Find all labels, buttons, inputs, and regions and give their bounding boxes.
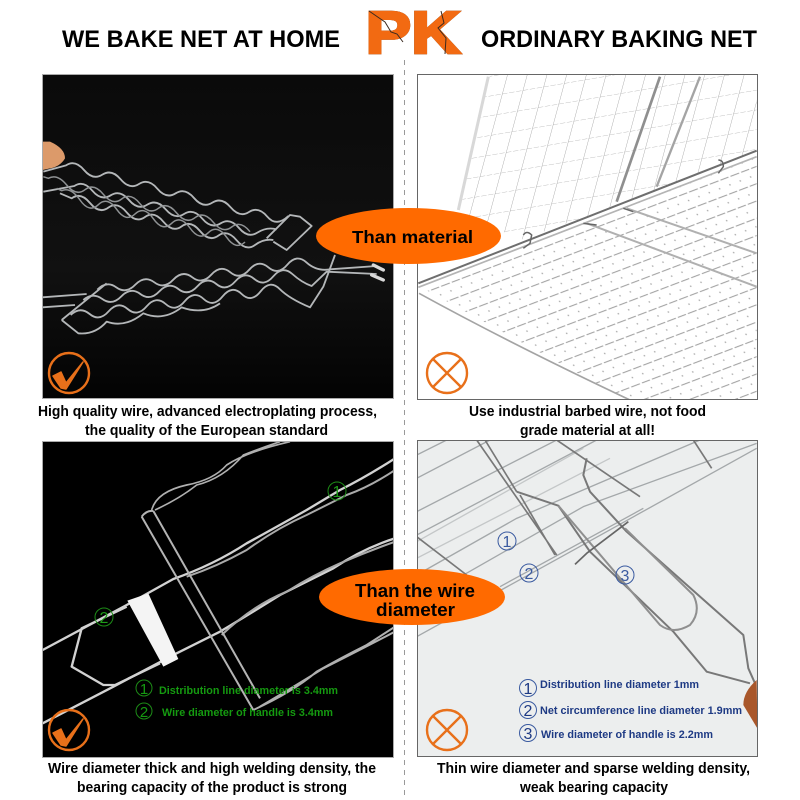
photo: thin wire grill [417, 440, 757, 728]
photo markers: 2 [525, 566, 534, 583]
caption: poor material: Use industrial barbed wire, not food [469, 404, 706, 420]
legend: thick wire: Distribution line diameter is 3.4mm [159, 685, 338, 697]
photo markers: 1 [503, 534, 512, 551]
photo marker 2 [95, 608, 113, 627]
photo: barbed wire mesh [418, 75, 757, 400]
legend: thick wire: 2 [140, 704, 148, 721]
caption: thin wire: weak bearing capacity [519, 780, 668, 796]
caption: poor material [469, 404, 706, 439]
legend: thick wire: 1 [140, 681, 148, 698]
legend: thick wire: Wire diameter of handle is 3.4mm [162, 707, 333, 719]
photo: wire grill on black [43, 142, 383, 334]
legend: thin wire: 3 [524, 726, 533, 743]
title: left: WE BAKE NET AT HOME [62, 26, 340, 53]
photo marker 1 [328, 482, 346, 501]
legend: thick wire [136, 680, 338, 721]
legend: thin wire: 1 [524, 681, 533, 698]
panel: poor material [417, 74, 758, 400]
photo marker 2: 2 [100, 610, 109, 627]
photo markers: 3 [621, 568, 630, 585]
legend: thin wire [520, 679, 742, 743]
photo: thick twisted wires [43, 442, 395, 723]
panel: thin wire [417, 440, 758, 757]
photo marker 1: 1 [333, 484, 342, 501]
caption: thin wire: Thin wire diameter and sparse welding density, [437, 761, 750, 777]
legend: thin wire: Wire diameter of handle is 2.2mm [541, 729, 713, 741]
callout: than the wire diameter [319, 569, 505, 625]
callout: than the wire diameter: Than the wire [355, 581, 475, 601]
callout: than material [316, 208, 501, 264]
caption: thick wire: Wire diameter thick and high welding density, the [48, 761, 376, 777]
icon: check mark [49, 353, 89, 393]
legend: thin wire: 2 [524, 703, 533, 720]
caption: poor material: grade material at all! [520, 423, 655, 439]
caption: thin wire [437, 761, 750, 796]
title: right: ORDINARY BAKING NET [481, 26, 757, 53]
caption: good material: the quality of the European standard [85, 423, 328, 439]
legend: thin wire: Distribution line diameter 1mm [540, 679, 699, 691]
caption: thick wire [48, 761, 376, 796]
panel: good material [42, 74, 394, 399]
logo: PK: PK [366, 0, 461, 66]
panel: thick wire [42, 441, 395, 758]
photo markers [498, 532, 634, 585]
caption: good material: High quality wire, advanced electroplating process, [38, 404, 377, 420]
callout: than material: Than material [352, 227, 473, 247]
callout: than the wire diameter: diameter [376, 600, 455, 620]
icon: cross [427, 353, 467, 393]
icon: cross [427, 710, 467, 750]
icon: check mark [49, 710, 89, 750]
caption: thick wire: bearing capacity of the product is strong [77, 780, 347, 796]
legend: thin wire: Net circumference line diameter 1.9mm [540, 705, 742, 717]
caption: good material [38, 404, 377, 439]
